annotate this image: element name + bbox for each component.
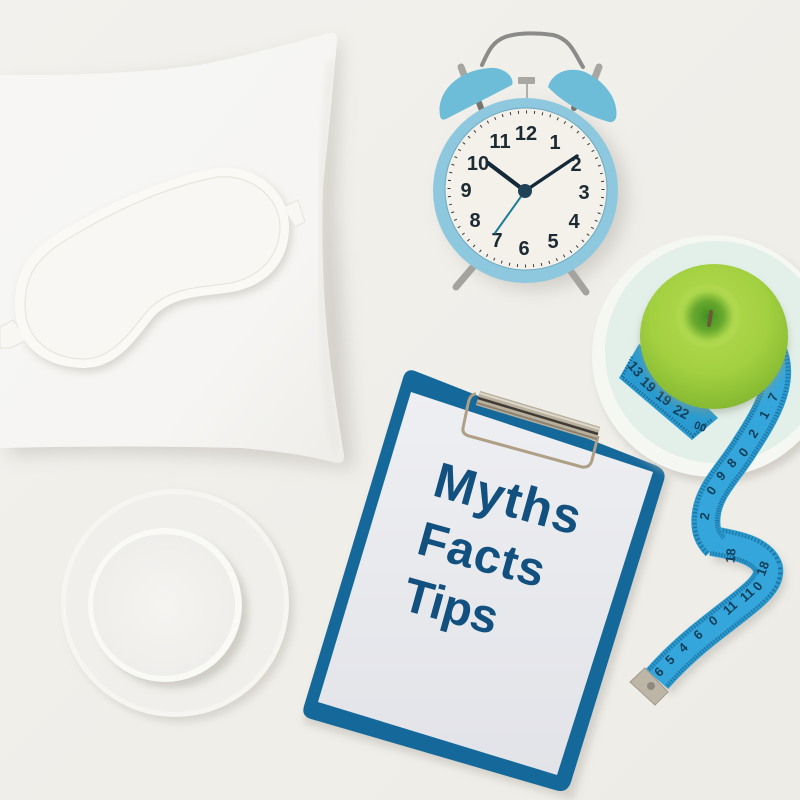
tape numbers: 11 [720,597,740,618]
tape loop in plate: 00 [692,419,708,435]
tape lower section [657,541,771,685]
tape numbers: 8 [724,455,740,471]
saucer and bowl [61,489,294,722]
clock face: 10 [467,153,489,175]
clock hands [488,156,577,233]
tape numbers: 7 [765,391,781,404]
clipboard board [303,370,665,791]
clock face: 8 [469,210,481,232]
right strap [283,200,305,227]
green apple [640,264,788,413]
tape numbers: 0 [735,445,752,460]
left strap [0,320,27,348]
legs [456,267,586,292]
metal tape end [630,668,668,705]
right bell [548,70,616,122]
tape numbers: 18 [753,559,772,578]
tape numbers: 6 [690,627,706,643]
pillow [0,32,354,469]
tape loop in plate: 22 [671,401,692,422]
clipboard [303,370,671,800]
alarm clock [433,33,627,292]
bell posts [461,67,599,108]
clock face: 4 [568,211,580,233]
tape loop in plate: 19 [637,373,660,396]
tape numbers: 18 [722,548,739,563]
clock face: 2 [570,154,582,176]
clock face: 9 [460,180,472,202]
tape numbers: 2 [697,511,713,521]
handle [482,33,583,67]
measuring tape [619,344,781,705]
tape numbers: 6 [651,664,667,680]
clock face [445,108,607,270]
tape loop in plate: 19 [653,387,675,409]
tape upper section [706,350,777,546]
clock face: 3 [578,182,590,204]
left bell [440,68,513,120]
tape numbers: 9 [713,468,729,484]
metal clip [463,393,599,467]
tape numbers: 2 [745,427,761,441]
clock face: 12 [515,123,537,145]
saucer [61,489,289,717]
tape numbers: 0 [706,612,721,629]
clock face: 7 [491,230,503,252]
heading: Facts: Facts [412,513,552,598]
plate [592,235,800,483]
tape loop in plate [619,344,718,440]
clock face: 5 [547,231,559,253]
tape numbers: 0 [703,483,720,498]
heading: Tips: Tips [397,569,504,645]
tape numbers: 5 [662,652,678,668]
sleep mask [0,168,305,372]
tape numbers: 11 [737,584,757,605]
tape numbers: 0 [749,579,766,594]
clock face: 6 [518,238,530,260]
clock face: 11 [489,131,511,153]
tape numbers: 4 [675,639,691,656]
tape numbers: 1 [756,408,772,422]
tape numbers [651,391,781,680]
clock face: 1 [549,132,561,154]
striker [518,77,535,98]
paper sheet [318,392,653,775]
tape loop in plate: 13 [625,358,647,380]
heading: Myths: Myths [428,452,589,546]
clock case [433,98,618,283]
bowl [88,528,248,688]
